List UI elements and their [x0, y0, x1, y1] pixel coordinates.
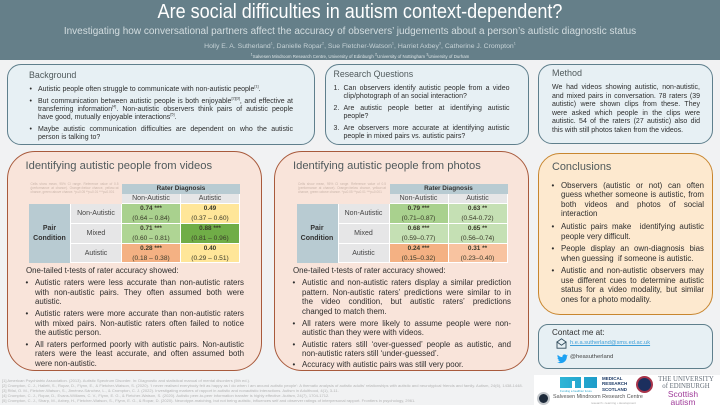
- t-test findings: photos: [292, 266, 511, 369]
- conclusion bullets: Observers (autistic or not) can often guess whether someone is autistic, from both videos and photos of social interaction: [561, 180, 704, 218]
- references: [2, 378, 523, 403]
- t-test findings: photos: Autistic raters still ‘over-guessed’ people as autistic, and non-autistic raters still ‘under-guessed’.: [302, 340, 511, 358]
- results table: videos: 0.40: [204, 245, 216, 252]
- results table: videos: (0.18 – 0.38): [132, 255, 170, 262]
- pair condition label: Pair: [43, 225, 56, 232]
- heading: videos: Identifying autistic people from videos: [26, 160, 212, 172]
- email address: h.e.a.sutherland@sms.ed.ac.uk: [570, 340, 650, 346]
- rater diagnosis header: [122, 184, 240, 194]
- t-test findings: videos: Autistic raters were more accurate than non-autistic raters with mixed pairs. Non-autistic raters often failed to notice the autistic person.: [35, 309, 244, 337]
- results table: photos: 0.63 **: [468, 205, 487, 212]
- results table: photos: 0.24 ***: [408, 245, 429, 252]
- results table: videos: 0.49: [204, 205, 216, 212]
- results table: photos: (0.54-0.72): [461, 215, 494, 222]
- conclusion bullets: Autistic and non-autistic observers may use different cues to determine autistic status for a video modality, but similar ones for a photo modality.: [561, 266, 704, 304]
- title: Are social difficulties in autism context-dependent?: [158, 1, 562, 23]
- references: [3] Rifai, O. M., Fletcher-Watson, S., Jiménez-Sánchez, L., & Crompton, C. J. (2022). Investigating markers of rapport in autistic and nonautistic interactions. Autism in Adulthood, 4(1), 3-11.: [2, 388, 339, 392]
- rater diagnosis header: Rater Diagnosis: [424, 185, 473, 192]
- contact heading: Contact me at:: [552, 328, 605, 336]
- logo strip: [534, 375, 720, 405]
- results table: photos: Mixed: [354, 230, 373, 237]
- logo: Scottish Autism: [668, 389, 698, 405]
- results table: photos: 0.31 **: [468, 245, 487, 252]
- twitter handle: @heasutherland: [570, 354, 613, 360]
- pair condition label: Condition: [301, 235, 333, 242]
- research question list: Are observers more accurate at identifying autistic people in mixed pairs vs. autistic pairs?: [344, 124, 510, 140]
- results table: videos: 0.88 ***: [199, 225, 221, 232]
- heading: conclusions: Conclusions: [552, 161, 611, 173]
- results table: videos: (0.60 – 0.81): [132, 235, 170, 242]
- results table: photos: Non-Autistic: [400, 195, 437, 202]
- table note: Cells show mean, 95% CI range. Reference value of 0.5 (performance at chance). Orange=below chance, yellow=at chance, green=above chance. *p≤0.05 **p≤0.01 ***p≤0.001: [30, 182, 118, 194]
- panel: research questions: [325, 64, 529, 145]
- results table: videos: (0.64 – 0.84): [132, 215, 170, 222]
- results table: videos: (0.81 – 0.96): [191, 235, 229, 242]
- authors: Holly E. A. Sutherland1, Danielle Ropar2, Sue Fletcher-Watson1, Harriet Axbey3, Catherine J. Crompton1: [204, 42, 516, 50]
- references: [4] Crompton, C. J., Ropar, D., Evans-Williams, C. V., Flynn, E. G., & Fletcher-Watson, S. (2020). Autistic peer-to-peer information transfer is highly effective. Autism, 24(7), 1704-1712.: [2, 392, 329, 398]
- logo: Salvesen Mindroom: [537, 392, 643, 405]
- pair condition label: [29, 204, 71, 263]
- t-test findings: photos: the video condition, but autistic raters’ predictions: [302, 297, 511, 306]
- method text: We had videos showing autistic, non-autistic, and mixed pairs in conversation. 78 raters (39 autistic) were shown clips from these. They were asked which people in the clips were autistic. 54 of the raters (27 autistic) also did this with still photos taken from the videos.: [552, 84, 700, 134]
- heading: background: Background: [29, 70, 76, 80]
- results table: photos: 0.68 ***: [408, 225, 429, 232]
- logo: MRC: Funding a healthier future: [560, 388, 592, 392]
- t-test findings: photos: All raters were more likely to assume people were non-autistic than they were with videos.: [302, 318, 511, 337]
- affiliations: 1Salvesen Mindroom Research Centre, University of Edinburgh 2University of Nottingham 3University of Durham: [251, 52, 469, 58]
- logo: MRC: MEDICAL: [602, 376, 622, 381]
- icon: email: [556, 338, 567, 349]
- research question list: Are autistic people better at identifying autistic people?: [344, 104, 510, 120]
- t-test findings: photos: pattern. Non-autistic raters’ predictions were similar to in: [302, 288, 511, 297]
- t-test findings: photos: changed to match them.: [302, 307, 387, 316]
- results table: videos: [29, 182, 240, 263]
- results table: videos: 0.74 ***: [140, 205, 162, 212]
- results table: photos: 0.65 **: [468, 225, 487, 232]
- results table: photos: 0.79 ***: [408, 205, 429, 212]
- pair condition label: [296, 204, 338, 263]
- logo: MRC: RESEARCH: [602, 381, 627, 386]
- table note: Cells show mean, 95% CI range. Reference value of 0.5 (performance at chance). Orange=below chance, yellow=at chance, green=above chance. *p≤0.05 **p≤0.01 ***p≤0.001: [298, 182, 386, 194]
- results table: videos: Mixed: [87, 230, 105, 237]
- pair condition label: Condition: [33, 235, 66, 242]
- background bullets: But communication between autistic people is both enjoyable[2][3], and effective at transferring information[4]. Non-autistic observers think pairs of autistic people have good, mutually enjoyable interactions[5].: [38, 96, 293, 121]
- panel: method: [538, 64, 713, 144]
- research question list: Can observers identify autistic people from a video clip/photograph of an social interaction?: [344, 84, 510, 100]
- pair condition label: Pair: [310, 225, 324, 232]
- logo: University of Edinburgh: of EDINBURGH: [662, 383, 710, 390]
- results table: videos: Autistic: [85, 250, 107, 257]
- logo: MRC: SCOTLAND: [602, 387, 627, 392]
- results table: photos: (0.15–0.32): [402, 255, 435, 262]
- panel: contact: [538, 324, 713, 369]
- heading: research questions: Research Questions: [334, 69, 413, 79]
- results table: photos: Autistic: [352, 250, 375, 257]
- rater diagnosis header: [390, 184, 508, 194]
- results table: photos: (0.71–0.87): [402, 215, 435, 222]
- results table: photos: Non-Autistic: [345, 210, 382, 217]
- rater diagnosis header: Rater Diagnosis: [157, 185, 205, 192]
- logo: Scottish Autism: Scottish: [668, 389, 698, 399]
- results table: videos: Non-Autistic: [132, 195, 170, 202]
- background bullets: Autistic people often struggle to communicate with non-autistic people[1].: [38, 84, 261, 92]
- t-test findings: videos: Autistic raters were less accurate than non-autistic raters with non-autistic pairs. They often assumed both were autistic.: [35, 278, 244, 306]
- logo: Salvesen Mindroom: research • learning • development: [591, 400, 636, 404]
- logo: Salvesen Mindroom: Salvesen Mindroom Research Centre: [553, 394, 643, 400]
- logo: University of Edinburgh: THE UNIVERSITY: [658, 376, 714, 383]
- results table: videos: (0.29 – 0.51): [191, 255, 229, 262]
- heading: photos: Identifying autistic people from photos: [293, 160, 481, 172]
- panel: identifying from photos: [274, 151, 529, 371]
- header banner: [0, 0, 720, 60]
- results table: photos: (0.56–0.74): [461, 235, 494, 242]
- conclusion bullets: Autistic pairs make identifying autistic people very difficult.: [561, 222, 704, 240]
- conclusion bullets: [552, 180, 704, 304]
- panel: research questions: 2.: [334, 104, 339, 112]
- results table: photos: (0.23–0.40): [461, 255, 494, 262]
- background bullets: [30, 84, 293, 141]
- results table: videos: Autistic: [199, 195, 221, 202]
- references: [2] Crompton, C. J., Hallett, S., Ropar, D., Flynn, E., & Fletcher-Watson, S. (2020). ‘I never realised everybody felt as happy as I do when I am around autistic people’: A thematic analysis of autistic adults’ relationships with autistic and neurotypical friends and family. Autism, 24(6), 1438-1448.: [2, 382, 523, 388]
- conclusion bullets: People display an own-diagnosis bias when guessing if someone is autistic.: [561, 244, 704, 262]
- results table: photos: Autistic: [466, 195, 489, 202]
- results table: videos: 0.28 ***: [140, 245, 162, 252]
- research question list: [334, 84, 510, 140]
- panel: background: [7, 64, 315, 145]
- heading: method: Method: [552, 68, 582, 78]
- logo: Edinburgh crest: [636, 376, 653, 393]
- logo: MRC: [560, 376, 627, 392]
- t-test findings: videos: [26, 266, 244, 368]
- panel: identifying from videos: [7, 151, 262, 371]
- results table: photos: [297, 182, 508, 263]
- results table: photos: (0.59–0.77): [402, 235, 435, 242]
- t-test findings: videos: All raters performed poorly with autistic pairs. Non-autistic raters were the least accurate, and often assumed both were non-autistic.: [35, 340, 244, 368]
- panel: research questions: 1.: [334, 84, 339, 92]
- panel: research questions: 3.: [334, 124, 339, 132]
- results table: videos: (0.37 – 0.60): [191, 215, 229, 222]
- panel: conclusions: [538, 153, 713, 315]
- results table: videos: Non-Autistic: [77, 210, 115, 217]
- references: [5] Crompton, C. J., Sharp, M., Axbey, H., Fletcher-Watson, S., Flynn, E. G., & Ropar, D. (2020). Neurotype-matching, but not being autistic, influences self and observer ratings of interpersonal rapport. Frontiers in psychology, 2961.: [2, 398, 415, 402]
- t-test findings: photos: One-tailed t-tests of rater accuracy showed:: [293, 266, 446, 275]
- t-test findings: videos: One-tailed t-tests of rater accuracy showed:: [26, 266, 179, 275]
- background bullets: Maybe autistic communication difficulties are dependent on who the autistic person is talking to?: [38, 126, 293, 141]
- icon: twitter bird: [557, 354, 568, 364]
- t-test findings: photos: Accuracy with autistic pairs was still very poor.: [302, 360, 463, 369]
- subtitle: Investigating how conversational partners affect the accuracy of observers’ judgements about a person’s autistic diagnostic status: [64, 26, 636, 36]
- results table: videos: 0.71 ***: [140, 225, 162, 232]
- t-test findings: photos: Autistic and non-autistic raters display a similar prediction: [302, 278, 511, 287]
- logo: University of Edinburgh: [658, 376, 714, 390]
